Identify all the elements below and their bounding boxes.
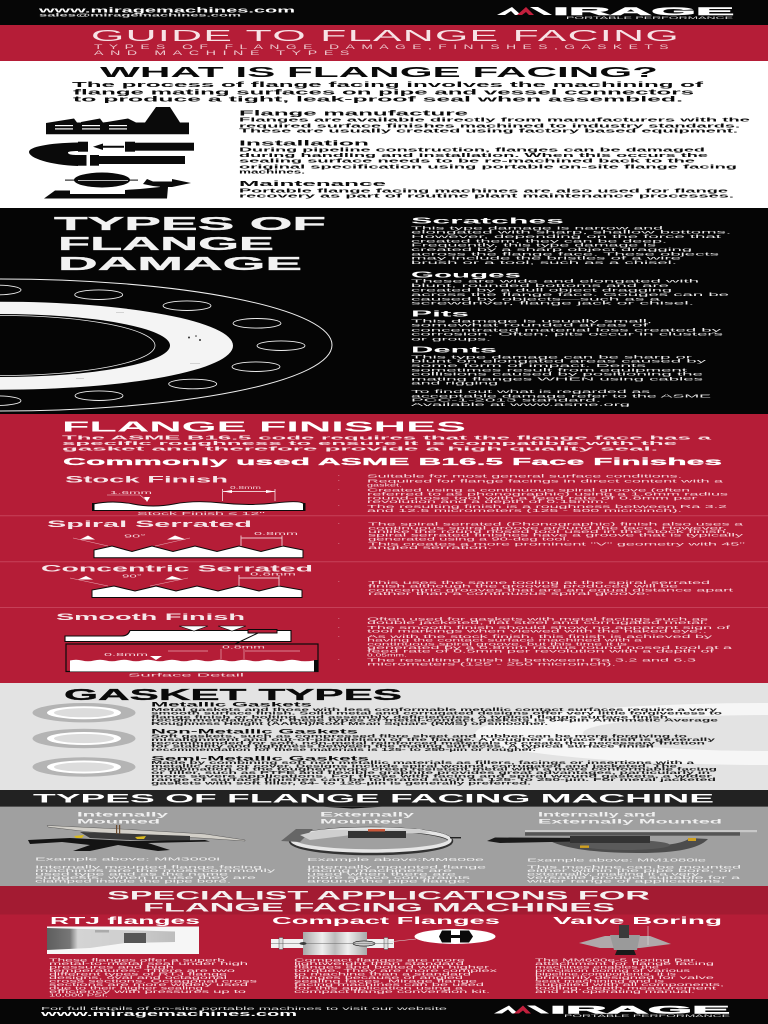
diagram: spiral serrated profile	[73, 531, 303, 558]
footer bar	[0, 999, 768, 1024]
bullet list: -	[338, 634, 340, 638]
heading: FLANGE	[58, 233, 274, 254]
text block: gouges: across the flange face. Gouges can be	[411, 292, 731, 297]
text block: scratches: brush or a tool, such as a chisel.	[411, 260, 677, 265]
bullet list	[338, 473, 731, 513]
Mirage logo	[497, 6, 734, 20]
column: RTJ flanges: metal-to-metal seal under high	[49, 961, 250, 966]
text block: maintenance: Portable flange facing machines are also used for flange	[239, 188, 728, 194]
column: RTJ flanges: designs, oval and octagonal	[49, 975, 227, 980]
column: externally mounted: more space constraints	[307, 875, 472, 880]
column: RTJ flanges: 10,000 PSI.	[49, 992, 108, 997]
bullet list: -	[338, 657, 340, 662]
image: MM1080ie machine	[487, 830, 757, 853]
heading: TYPES OF FLANGE FACING MACHINE	[33, 792, 714, 806]
column: internally mounted: Internally	[77, 812, 169, 819]
icon: gasket ring	[32, 703, 136, 722]
text block: gouges: created by a dull object dragging	[411, 287, 673, 292]
column: compact flanges: flanges because of angled	[294, 975, 465, 980]
bullet list: feed rate of 0.5mm per revolution with a depth of	[367, 649, 717, 654]
text block: maintenance: recovery as part of routine plant maintenance processes.	[239, 194, 736, 200]
column: externally mounted	[281, 812, 488, 884]
column: internally mounted: clamped inside the pipe bore.	[35, 879, 231, 884]
column: RTJ flanges: different types of RTJ flange	[49, 971, 229, 976]
gasket: metallic: Roughness Height (AARH)/Root Mean Square (RMS) or smoother.	[151, 721, 548, 726]
diagram: spiral serrated profile: 0.8mm	[254, 531, 298, 537]
bullet list: micrometers (125 - 250 microinch).	[367, 662, 616, 667]
panel: what is flange facing	[0, 61, 768, 208]
gasket: semi-metallic: range of surface finishes can be tolerated such as 125- to 250-µin. For metal jacketed	[151, 777, 717, 782]
column: compact flanges: Compact Flanges	[272, 916, 501, 927]
heading: FLANGE FACING MACHINES	[143, 900, 615, 914]
text block: flange manufacture: These are usually created using factory based equipment.	[239, 129, 740, 135]
finish: spiral serrated	[47, 519, 747, 558]
intro text: to produce a tight, leak-proof seal when assembled.	[73, 97, 683, 104]
icon: gasket ring	[32, 757, 136, 777]
bullet list: 0.05mm.	[367, 652, 407, 657]
subtitle	[94, 44, 675, 57]
diagram: stock finish profile	[92, 485, 306, 517]
bullet list: round-nose tool with a feed rate of 0.8mm per	[367, 495, 699, 500]
intro text: flange mating surfaces on pipe and vessel connectors	[73, 89, 694, 96]
column: valve boring: precision boring of various	[535, 968, 692, 973]
text block: gouges	[411, 269, 731, 306]
gasket: non-metallic	[32, 728, 717, 752]
text block: scratches: Frequently, this type damage is	[411, 243, 658, 248]
text block: gouges: blunt, rounded bottoms and are	[411, 283, 671, 288]
Mirage logo: PORTABLE PERFORMANCE	[566, 15, 734, 20]
column: internally and externally mounted: externally, making it a very	[527, 871, 701, 876]
column: compact flanges: torque. They are more complex	[294, 968, 499, 973]
text block: installation: original specification using portable on-site flange facing	[239, 164, 737, 170]
text block: standard reference: To find out what is regarded as	[411, 389, 652, 394]
panel: specialist applications	[0, 886, 768, 999]
column: valve boring: Valve Boring	[553, 916, 722, 927]
bullet list: Suitable for most general surface conditions.	[367, 474, 682, 479]
footer website: www.miragemachines.com	[38, 1011, 297, 1018]
bullet list: concentric grooves that are an equal distance apart	[368, 587, 736, 592]
bullet list: The resulting finish is a roughness between Ra 3.2	[367, 504, 729, 509]
gasket: non-metallic: recommendation for these materials is 125- to 250-µin or rougher.	[151, 747, 536, 752]
column: externally mounted: Example above:MM600e	[307, 857, 486, 862]
bullet list: and 12.5 micrometers (125 - 500 microinch).	[367, 508, 682, 513]
bullet list: The resulting finish is between Ra 3.2 and 6.3	[367, 658, 698, 663]
diagram: spiral serrated profile: 90°	[124, 534, 146, 540]
column: valve boring: tooling, depth measurement	[535, 985, 718, 990]
gasket: non-metallic: for stability and tightness between the mating surfaces. A typical surface finish	[151, 744, 655, 749]
text block: scratches	[411, 215, 731, 265]
column: internally mounted: Internally mounted flange facing	[35, 864, 264, 869]
bullet list: unlike the round nosed tool used in the stock finish,	[368, 529, 730, 534]
column: RTJ flanges: temperatures. There are two	[49, 968, 237, 973]
text block: pits: This damage is usually small,	[411, 318, 652, 323]
column: RTJ flanges: RTJ flanges	[50, 916, 201, 927]
text block: dents: sometimes result from equipment	[411, 367, 690, 372]
text block: gouges: Gouges	[411, 269, 522, 279]
column: RTJ flanges: sections are more widely used	[49, 982, 250, 987]
column: internally and externally mounted: wider range of applications.	[527, 879, 725, 884]
panel: gasket types	[0, 683, 768, 790]
text block: pits: Pits	[411, 309, 470, 319]
text block: standard reference: PCC-1-2013 standard.	[411, 398, 601, 403]
column: internally mounted	[28, 812, 277, 884]
finish: concentric serrated	[41, 564, 736, 598]
column: RTJ flanges: due to their higher sealing	[49, 985, 204, 990]
column: externally mounted: Internally mounted flange	[307, 864, 488, 869]
icon: gasket ring	[32, 729, 136, 748]
diagram: stock finish profile: 0.8mm	[230, 485, 261, 491]
bullet list: continuous spiral groove, but this time it is	[367, 641, 630, 646]
bullet list: -	[338, 616, 340, 621]
finish: concentric serrated: Concentric Serrated	[41, 564, 313, 574]
text block: dents: some form of impact. Dents	[411, 363, 649, 368]
panel: types of flange damage	[0, 208, 768, 414]
text block: dents: This type damage can be sharp or	[411, 354, 694, 359]
column: compact flanges: Compact flanges are more	[294, 957, 467, 962]
Mirage logo: PORTABLE PERFORMANCE	[564, 1013, 731, 1018]
bullet list: As with the stock finish, this finish is achieved by	[367, 634, 715, 639]
text block: gouges: These are wide and elongated with	[411, 279, 700, 284]
image: boring bar on valve	[579, 925, 671, 955]
bullet list: referred to as phonographic) using a 1.6mm radius	[367, 491, 731, 496]
bullet list: This uses the same tooling at the spiral serrated	[368, 580, 712, 585]
text block: scratches: created them, they can be deep.	[411, 238, 667, 243]
column: externally mounted: used when there are	[307, 871, 458, 876]
bullet list: Often used for gaskets with metal facings such as	[367, 616, 711, 621]
subtitle: TYPES OF FLANGE DAMAGE,FINISHES,GASKETS	[94, 44, 675, 51]
text block: installation: sealing surface needs to be re-machined back to the	[239, 159, 695, 165]
bullet list: -	[338, 478, 340, 482]
intro text: The ASME B16.5 code requires that the flange face has a	[62, 435, 715, 441]
icon: maintenance worker	[44, 172, 191, 198]
column: internally and externally mounted: Example above: MM1080ie	[527, 857, 707, 862]
diagram: smooth finish profile and surface detail	[65, 626, 318, 678]
text block: pits: or groups.	[411, 336, 491, 341]
panel: types of flange facing machine	[0, 790, 768, 886]
bullet list: continuous spiral groove around the face. However,	[368, 525, 727, 530]
text block: dents: and rigging	[411, 381, 499, 386]
bullet list: rather than a continuous spiral groove.	[368, 591, 650, 596]
bullet list	[338, 579, 736, 596]
bullet list: -	[338, 486, 340, 492]
text block: standard reference	[411, 389, 711, 407]
text block: flange manufacture: Flanges are available directly from manufacturers with the	[239, 118, 750, 124]
text block: scratches: This type damage is narrow and	[411, 225, 664, 230]
bullet list: Created using a continuous spiral groove (often	[367, 487, 692, 492]
bullet list: Required for flange facings in direct content with a	[367, 479, 725, 484]
column: valve boring: supplied with all components,	[535, 982, 724, 987]
text block: gouges: caused by objects—such as a	[411, 296, 662, 301]
image: MM3000i machine	[28, 825, 245, 851]
bullet list	[338, 521, 747, 550]
text block: pits: concentrated material loss created by	[411, 327, 724, 332]
intro text: specific roughness to ensure it is compatible with the	[62, 441, 677, 447]
text block: dents: Dents	[411, 345, 498, 355]
column: RTJ flanges: pressures and high	[49, 964, 176, 969]
bullet list: spiral serrated finishes have a groove that is typically	[368, 533, 746, 538]
diagram: concentric serrated profile: 90°	[122, 574, 142, 580]
text block: dents	[411, 345, 709, 386]
panel: flange finishes	[0, 414, 768, 683]
Mirage logo: IRAGE	[553, 6, 734, 18]
bullet list: -	[338, 541, 340, 546]
column: valve boring: pipeline components. It is	[535, 971, 678, 976]
column: compact flanges: compact flange conversion kit.	[294, 989, 490, 994]
text block: scratches: However, depending on the force that	[411, 234, 724, 239]
text block: dents: mating flanges WHEN using cables	[411, 376, 706, 381]
text block: dents: collisions caused by positioning the	[411, 372, 705, 377]
image: compact flange section	[271, 929, 496, 955]
column: internally and externally mounted: Internally and	[538, 812, 656, 819]
column: RTJ flanges: efficiency with pressures up to	[49, 989, 248, 994]
column: valve boring	[535, 916, 724, 994]
icon: factory	[46, 107, 189, 134]
text block: installation: During pipeline construction, flanges can be damaged	[239, 148, 705, 154]
text block: scratches: created by a sharp object dragging	[411, 247, 694, 252]
gasket: semi-metallic: Made by combining soft non metallic materials as fillers, facings or insertions with a	[151, 760, 696, 765]
text block: dents: blunt on elongated areas caused by	[411, 359, 709, 364]
diagram: smooth finish profile and surface detail: 0.8mm	[104, 652, 148, 658]
gasket: non-metallic: recommended for soft, non-metal reinforced materials to create the necessary friction	[151, 740, 706, 745]
text block: pits: corrosion. Often, pits occur in clusters	[411, 332, 726, 337]
bullet list: -	[338, 521, 340, 526]
gasket: metallic: flange finish or bolting and assembly deficiencies. A typical flange surface finish	[151, 714, 669, 719]
text block: flange manufacture: required surface finishes machined to industry standards.	[239, 123, 742, 129]
finish: spiral serrated: Spiral Serrated	[47, 519, 252, 529]
gasket: non-metallic: Non-Metallic Gaskets	[151, 728, 359, 735]
gasket: metallic: Metal gaskets and those with less conformable metallic contact surfaces require a very	[151, 707, 719, 712]
header bar	[0, 0, 768, 25]
column: RTJ flanges: cross sections. Octagonal cross	[49, 978, 259, 983]
email address: sales@miragemachines.com	[39, 13, 241, 18]
column: valve boring: primarily designed for valve	[535, 975, 716, 980]
column: internally and externally mounted: Externally Mounted	[538, 818, 722, 825]
gasket: metallic	[32, 702, 723, 726]
bullet list: gasket.	[367, 482, 402, 487]
column: internally mounted: machines are the most commonly	[35, 868, 277, 873]
heading	[54, 213, 326, 274]
heading: FLANGE FINISHES	[62, 419, 466, 436]
text block: maintenance: Maintenance	[239, 179, 386, 188]
column: compact flanges: sealing faces. Mirage flange	[294, 978, 479, 983]
bullet list: revolution and a depth of 0.15mm.	[367, 499, 608, 504]
text block: scratches: elongated with sharp, shallow bottoms.	[411, 230, 731, 235]
diagram: smooth finish profile and surface detail: 0.8mm	[222, 644, 265, 650]
icon: H section callout	[414, 929, 496, 944]
heading: DAMAGE	[58, 253, 302, 274]
diagram: stock finish profile: Stock Finish ≤ 12"	[137, 511, 266, 517]
column: externally mounted: Externally	[320, 812, 415, 819]
flange illustration	[0, 279, 332, 411]
bullet list: -	[338, 579, 340, 584]
title banner	[0, 25, 768, 61]
bullet list: The smooth finish should show no apparent sign of	[367, 625, 733, 630]
bullet list: The spiral serrated (Phonographic) finish also uses a	[368, 521, 745, 526]
intro text: gasket and therefore provide a high quality seal.	[62, 447, 660, 453]
column: externally mounted: facing machines are	[307, 868, 454, 873]
text block: installation: Installation	[239, 139, 370, 148]
diagram: concentric serrated profile	[70, 571, 302, 598]
column: compact flanges	[271, 916, 501, 994]
bullet list: angled serration.	[368, 545, 492, 550]
diagram: smooth finish profile and surface detail: Surface Detail	[128, 672, 244, 678]
column: valve boring: seat machining and is	[535, 978, 666, 983]
gasket: metallic: Metallic Gaskets	[151, 702, 313, 709]
image: RTJ flange section	[47, 926, 199, 954]
gasket: semi-metallic: gaskets with soft filler, 64- to 125-µin is generally preferred.	[151, 780, 531, 785]
text block: gouges: screwdriver, flange jack or chisel.	[411, 301, 694, 306]
bullet list: finish although the grooves produced will be	[368, 584, 680, 589]
main title: GUIDE TO FLANGE FACING	[91, 28, 680, 45]
column: valve boring: attachment for flange facing	[535, 961, 716, 966]
bullet list: tool markings when viewed with the naked eye..	[367, 629, 707, 634]
column: compact flanges: facing machines can be used	[294, 982, 486, 987]
bullet list: -	[338, 624, 340, 630]
finish: smooth: Smooth Finish	[56, 612, 245, 622]
text block: standard reference: Available at www.asme.org	[411, 402, 631, 407]
gasket: semi-metallic	[32, 755, 718, 785]
column: valve boring: machines enables the	[535, 964, 660, 969]
gasket: non-metallic: misalignment and out-of-parallelism of the flange. A rougher surface finish is generally	[151, 737, 717, 742]
bullet list	[338, 616, 734, 667]
Mirage logo: IRAGE	[550, 1004, 730, 1016]
column: internally and externally mounted: This machine can be mounted	[527, 864, 743, 869]
text block: pits	[411, 309, 726, 341]
gasket: semi-metallic: Semi-Metallic Gaskets	[151, 755, 370, 762]
text block: installation: machines.	[239, 170, 306, 176]
text block: maintenance	[239, 179, 736, 200]
gasket: metallic: recommendation for these types of metal-contact gaskets is 64-µin Arithmetic Average	[151, 718, 720, 723]
column: internally mounted: Mounted	[77, 818, 160, 825]
bullet list: This creates a more prominent "V" geometry with 45"	[368, 541, 747, 546]
intro text	[72, 82, 705, 104]
heading: GASKET TYPES	[64, 687, 403, 704]
text block: flange manufacture: Flange manufacture	[239, 108, 468, 117]
finish: stock: Stock Finish	[65, 474, 228, 484]
finish: smooth	[56, 612, 734, 678]
subheading: Commonly used ASME B16.5 Face Finishes	[63, 457, 723, 468]
text block: scratches: across the flange face. These objects	[411, 251, 722, 256]
heading: WHAT IS FLANGE FACING?	[100, 65, 658, 81]
column: compact flanges: lightweight than standard	[294, 961, 466, 966]
bullet list: having the contact surface machined with a	[367, 638, 644, 643]
footer call to action: For full details of on-site portable machines to visit our website	[41, 1006, 449, 1011]
column: externally mounted: Mounted	[320, 818, 403, 825]
column: RTJ flanges	[47, 916, 259, 997]
Mirage logo	[494, 1004, 731, 1018]
bullet list: generated by a 0.8mm radius round nosed tool at a	[367, 645, 734, 650]
gasket: non-metallic: Soft gaskets, such as compressed fibre sheet and rubber can be more forgiving to	[151, 733, 688, 738]
column: RTJ flanges: These flanges offer a superb	[49, 957, 226, 962]
column: internally mounted: suggests, when in use they are	[35, 875, 258, 880]
gasket: semi-metallic: or filler, such as PTFE and flexible graphite provides great advantages, particularly in	[151, 770, 711, 775]
website address: www.miragemachines.com	[36, 8, 295, 14]
column: externally mounted: around the pipe flange.	[307, 879, 470, 884]
text block: scratches: may include the bristles of a wire	[411, 256, 683, 261]
heading: TYPES OF	[54, 213, 326, 234]
column: internally and externally mounted: versatile product suitable for a	[527, 875, 741, 880]
text block: scratches: Scratches	[411, 215, 565, 225]
column: compact flanges: for this application using a	[294, 985, 465, 990]
icon: pipeline installation	[29, 142, 194, 166]
bullet list: generated using a 90-deg tool.	[368, 536, 570, 541]
text block: installation: during handling and installation. When this occurs the	[239, 153, 708, 159]
image: MM600e machine	[281, 829, 461, 853]
subtitle: AND MACHINE TYPES	[94, 50, 356, 57]
gasket: semi-metallic: more severe applications. For those with facing and spiral wound gaskets, a wider	[151, 773, 713, 778]
diagram: stock finish profile: 1.6mm	[110, 490, 152, 496]
text block: standard reference: acceptable damage refer to the ASME	[411, 393, 711, 398]
heading: SPECIALIST APPLICATIONS FOR	[107, 889, 651, 903]
column: internally mounted: Example above: MM3000i	[35, 857, 220, 862]
bullet list: -	[338, 473, 340, 478]
intro text: The process of flange facing involves the machining of	[72, 82, 705, 89]
column: internally mounted: used type and as the name	[35, 871, 230, 876]
column: internally and externally mounted: either within the pipe bore, or	[527, 868, 735, 873]
column: internally and externally mounted	[487, 812, 757, 884]
bullet list: -	[338, 503, 340, 508]
intro text	[62, 435, 715, 453]
text block: pits: somewhat rounded areas of	[411, 323, 651, 328]
finish: stock	[65, 473, 731, 517]
bullet list: double jacketed, flat steel and corrugated metal.	[367, 620, 708, 625]
gasket: semi-metallic: combination of the tougher, more creep resistant metal with a more conformable facing	[151, 767, 718, 772]
heading	[107, 889, 651, 914]
column: valve boring: and an operating manual.	[535, 989, 695, 994]
column: compact flanges: to machine than a standard	[294, 971, 473, 976]
column: compact flanges: flanges and bolted with higher	[294, 964, 491, 969]
diagram: concentric serrated profile: 0.8mm	[250, 571, 296, 577]
gasket: semi-metallic: metallic core or cover. Designs include spiral wound, corrugated and jacketed. The	[151, 763, 679, 768]
text block: installation	[239, 139, 737, 176]
text block: flange manufacture	[239, 108, 750, 135]
gasket: metallic: smooth surface finish. Solid metal and corrugated designs offer very little forgiveness to	[151, 711, 723, 716]
column: valve boring: The MM600e-5 Boring Bar	[535, 957, 696, 962]
